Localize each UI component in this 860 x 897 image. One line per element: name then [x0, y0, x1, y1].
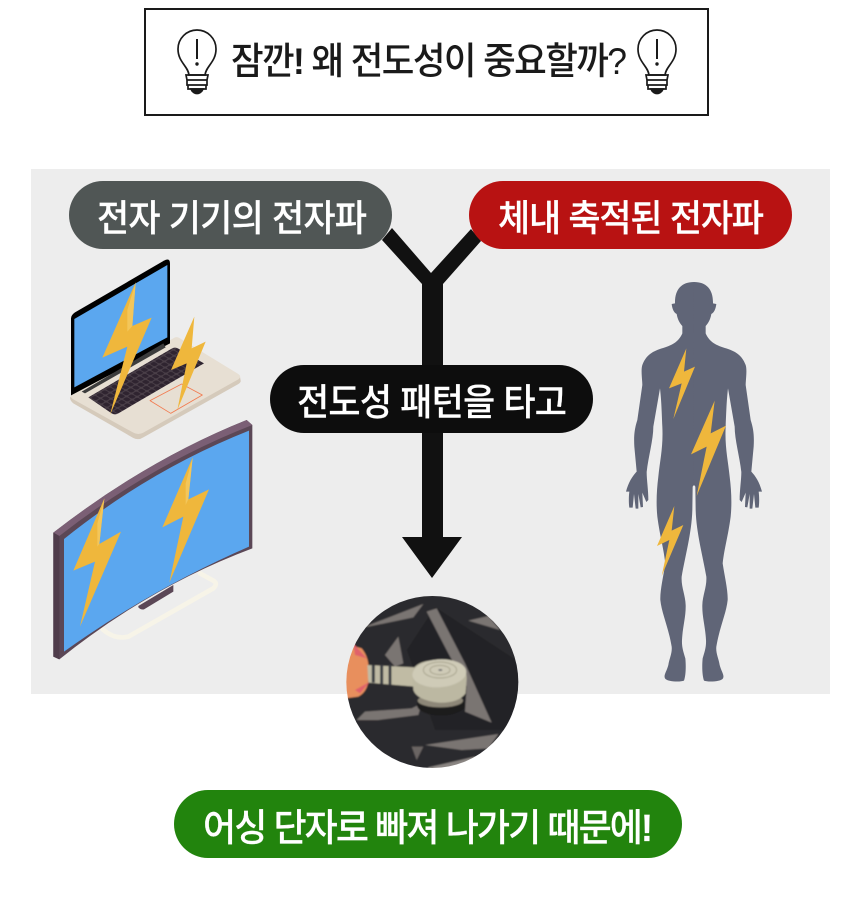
icon: right light bulb [638, 30, 676, 94]
icon: laptop with lightning [70, 259, 241, 439]
pill: device electromagnetic waves: 전자 기기의 전자파 [97, 197, 367, 239]
heading text: 잠깐! 왜 전도성이 중요할까? [231, 40, 627, 82]
icon: human body with lightning [626, 282, 762, 682]
pill: body accumulated waves [469, 181, 792, 249]
pill: along conductive pattern [270, 365, 593, 433]
icon: curved monitor with lightning [53, 420, 252, 659]
arrow: merging Y arrow [382, 228, 481, 578]
icon: left light bulb [178, 30, 216, 94]
photo: earthing terminal snap [346, 596, 518, 768]
pill: body accumulated waves: 체내 축적된 전자파 [498, 197, 764, 239]
pill: device electromagnetic waves [69, 181, 392, 249]
panel: grey background [31, 169, 830, 694]
title box [145, 9, 708, 115]
pill: conclusion [174, 790, 682, 858]
pill: conclusion: 어싱 단자로 빠져 나가기 때문에! [203, 806, 653, 849]
pill: along conductive pattern: 전도성 패턴을 타고 [297, 381, 567, 423]
